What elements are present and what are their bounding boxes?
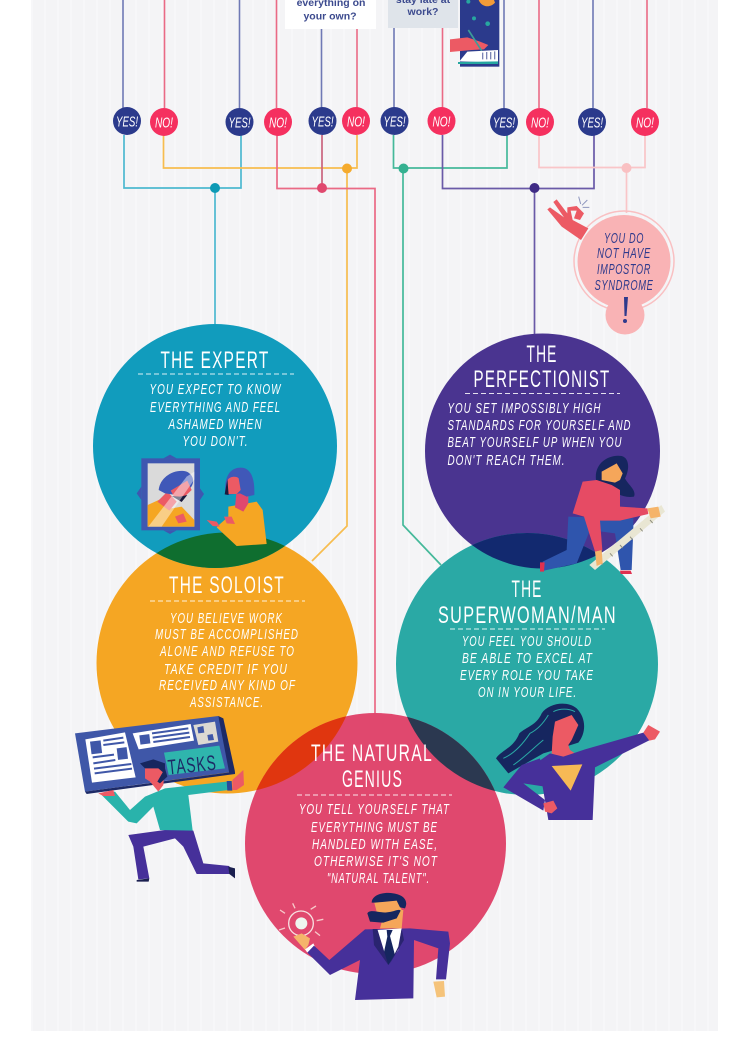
yes and no buttons: NO! [155,114,174,132]
text: the soloist: ALONE AND REFUSE TO [159,643,295,660]
text: the soloist [150,572,305,711]
text: the natural genius: "NATURAL TALENT". [327,870,430,887]
panel: superwoman circle [396,533,658,795]
illustration: woman and mirror [137,455,267,546]
text: the perfectionist: YOU SET IMPOSSIBLY HIGH [448,400,602,417]
text: the expert: THE EXPERT [160,347,270,374]
connector: no impostor syndrome pink [539,135,645,213]
text: the soloist: YOU BELIEVE WORK [170,610,283,627]
icon: OK hand [547,197,589,240]
text: the perfectionist: STANDARDS FOR YOURSELF AND [448,417,632,434]
yes and no buttons: NO! [531,114,550,132]
yes and no buttons: YES! [228,114,251,132]
text: the expert: EVERYTHING AND FEEL [150,399,281,416]
question card: on your own [285,0,376,29]
text: the superwoman/man: SUPERWOMAN/MAN [438,602,617,629]
text: the soloist: MUST BE ACCOMPLISHED [155,626,299,643]
result: you do not have impostor syndrome: IMPOSTOR [597,261,651,278]
woman [207,468,267,546]
yes and no buttons: NO! [636,114,655,132]
text: the natural genius: YOU TELL YOURSELF THAT [299,801,450,818]
yes and no buttons: NO! [347,114,366,130]
yes and no buttons [113,107,659,136]
illustration: man with glowing orb [279,893,450,1000]
result: you do not have impostor syndrome: SYNDROME [594,277,654,294]
yes and no buttons: YES! [493,114,516,132]
text: the expert: ASHAMED WHEN [168,416,262,433]
icon: night notebook [450,0,499,67]
panel: perfectionist circle [425,334,660,568]
tasks board [75,716,235,794]
yes and no buttons: YES! [384,114,406,130]
mirror [137,455,204,534]
question card: stay late [388,0,458,28]
panel: soloist circle [96,532,358,794]
text: the expert: YOU EXPECT TO KNOW [150,381,282,398]
panel: expert circle [93,324,337,568]
yes and no buttons: NO! [269,114,288,132]
text: the perfectionist: THE [526,341,558,368]
text: the perfectionist: DON'T REACH THEM. [448,452,566,469]
flowchart lines from questions [123,0,647,108]
text: the perfectionist: BEAT YOURSELF UP WHEN YOU [448,434,622,451]
overlap: perfectionist and superwoman [472,533,596,568]
question card: stay late: work? [407,6,438,18]
result: you do not have impostor syndrome [574,211,674,334]
orb and rays [279,903,323,936]
text: the natural genius: THE NATURAL [311,740,433,767]
text: the natural genius: EVERYTHING MUST BE [311,819,438,836]
text: the expert [138,347,294,450]
yes and no buttons: NO! [432,114,451,130]
yes and no buttons: YES! [581,114,604,132]
text: the expert: YOU DON'T. [182,433,248,450]
text: the soloist: ASSISTANCE. [189,694,264,711]
text: the superwoman/man: THE [512,576,542,603]
text: the superwoman/man [438,576,617,701]
question card: on your own: your own? [303,10,357,22]
text: the soloist: THE SOLOIST [169,572,285,599]
text: the natural genius: GENIUS [342,766,403,793]
illustration: man carrying tasks board [75,716,244,882]
text: tasks label: TASKS [167,752,218,780]
text: the superwoman/man: BE ABLE TO EXCEL AT [462,650,593,667]
yes and no buttons: YES! [312,114,334,130]
connector: natural genius red [277,135,375,714]
text: the perfectionist: PERFECTIONIST [474,366,610,393]
connector: expert teal [124,135,241,324]
text: the soloist: TAKE CREDIT IF YOU [164,661,288,678]
overlap: superwoman and genius [407,716,495,791]
text: the superwoman/man: EVERY ROLE YOU TAKE [460,667,594,684]
panel: natural genius circle [245,713,506,974]
connector: superwoman green [394,135,507,565]
overlap: expert and soloist [156,532,285,568]
text: the natural genius [297,740,452,887]
illustration: woman with ruler [540,456,665,574]
soloist node [342,164,352,174]
text: the perfectionist [448,341,632,469]
illustration: superwoman [496,704,660,820]
result: you do not have impostor syndrome: YOU DO [604,230,644,247]
overlap: soloist and genius [256,716,346,790]
result: you do not have impostor syndrome: NOT HAVE [597,245,651,262]
text: the superwoman/man: YOU FEEL YOU SHOULD [462,633,592,650]
text: the soloist: RECEIVED ANY KIND OF [159,677,296,694]
connector: perfectionist purple [442,135,594,334]
connector: soloist yellow [164,135,357,561]
text: the natural genius: OTHERWISE IT'S NOT [314,853,438,870]
man [98,759,244,882]
yes and no buttons: YES! [116,114,139,130]
text: the superwoman/man: ON IN YOUR LIFE. [478,684,577,701]
text: the natural genius: HANDLED WITH EASE, [312,836,438,853]
